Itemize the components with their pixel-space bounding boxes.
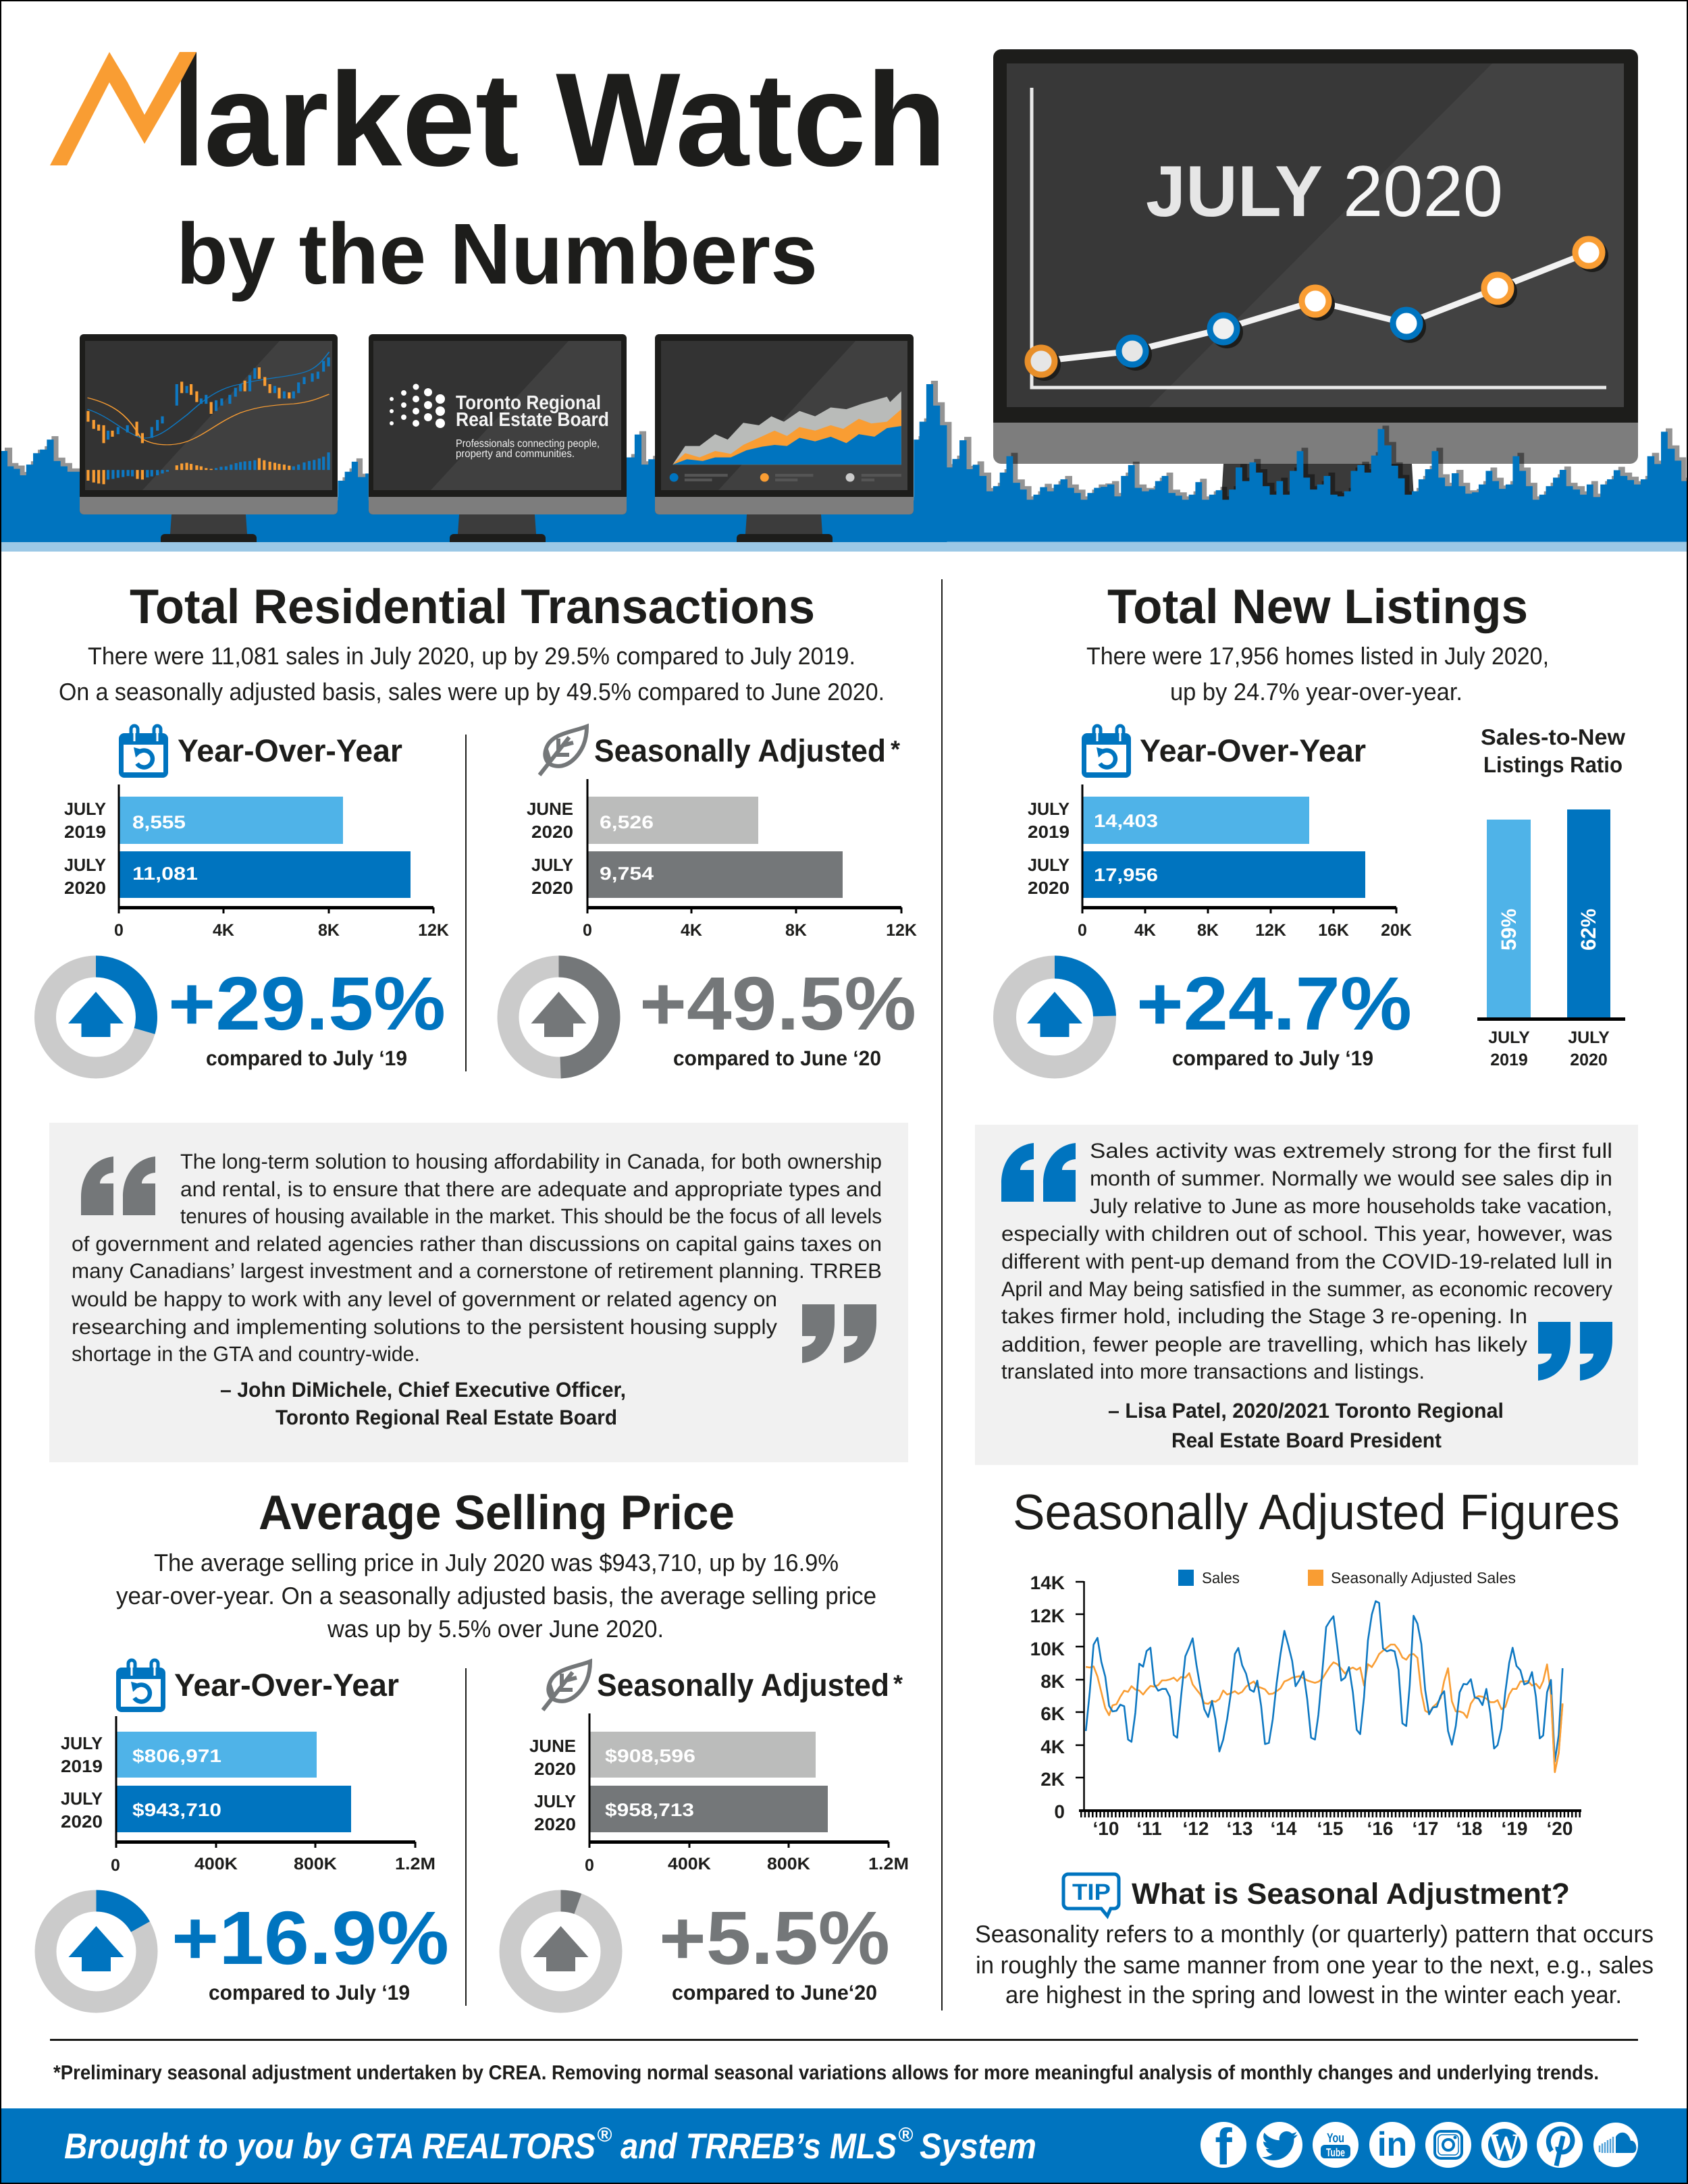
line chart: sales vs seasonally adjusted sales: 10K	[1030, 1639, 1065, 1659]
bar chart: price seasonally adjusted: 400K	[668, 1855, 711, 1873]
stat caption: compared to July ‘19	[1172, 1046, 1373, 1070]
quote text: takes firmer hold, including the Stage 3 re-opening. In	[1001, 1304, 1527, 1328]
panel: seasonally adjusted figures	[975, 1484, 1654, 2008]
footer credit: ®	[898, 2124, 914, 2146]
quote text: April and May being satisfied in the summer, as economic recovery	[1001, 1277, 1612, 1301]
subheading: seasonally adjusted: Seasonally Adjusted	[597, 1667, 889, 1703]
quote attribution: – John DiMichele, Chief Executive Officer,	[220, 1378, 626, 1402]
bar chart: price seasonally adjusted: JULY	[534, 1791, 576, 1811]
quote text: researching and implementing solutions to the persistent housing supply	[72, 1315, 778, 1339]
bar chart: price year over year: 2020	[61, 1811, 103, 1832]
bar chart: sales seasonally adjusted: 4K	[681, 921, 702, 940]
divider: main vertical	[941, 579, 943, 2010]
quote text: different with pent-up demand from the COVID-19-related lull in	[1001, 1250, 1612, 1273]
quote text: tenures of housing available in the market. This should be the focus of all levels	[180, 1204, 882, 1228]
skyline shadow	[5, 381, 1688, 539]
bar chart: sales-to-new listings ratio: 2019	[1490, 1050, 1528, 1069]
icon: calendar	[1082, 726, 1131, 778]
bar chart: price year over year: 0	[111, 1856, 120, 1875]
heading: Seasonally Adjusted Figures	[1013, 1484, 1620, 1540]
intro text	[116, 1549, 876, 1643]
bar chart: listings year over year: JULY	[1028, 799, 1070, 819]
line chart: sales vs seasonally adjusted sales: 6K	[1040, 1703, 1065, 1724]
quote text: translated into more transactions and listings.	[1001, 1360, 1425, 1383]
quote text: would be happy to work with any level of government or related agency on	[71, 1287, 777, 1311]
bar chart: sales year over year: 11,081	[132, 863, 198, 884]
quote attribution: – Lisa Patel, 2020/2021 Toronto Regional	[1108, 1399, 1504, 1422]
panel: total residential transactions	[45, 580, 917, 1071]
monitor date text: 2020	[1343, 151, 1503, 232]
icon: soundcloud	[1593, 2123, 1638, 2167]
bar chart: listings year over year: 16K	[1318, 921, 1349, 940]
intro text: There were 11,081 sales in July 2020, up by 29.5% compared to July 2019.	[88, 642, 855, 670]
bar chart: listings year over year: JULY	[1028, 855, 1070, 875]
intro text: up by 24.7% year-over-year.	[1170, 678, 1462, 705]
line chart: sales vs seasonally adjusted sales: ‘12	[1183, 1818, 1209, 1839]
seasonal adjustment explanation: in roughly the same manner from one year to the next, e.g., sales	[976, 1951, 1654, 1979]
quote attribution	[1108, 1399, 1504, 1452]
bar chart: price seasonally adjusted: 2020	[534, 1759, 576, 1779]
stat: +24.7%: +24.7%	[1136, 961, 1412, 1046]
bar chart: price seasonally adjusted: 800K	[767, 1855, 810, 1873]
line chart: sales vs seasonally adjusted sales: ‘18	[1456, 1818, 1482, 1839]
intro text	[1086, 642, 1549, 705]
bar chart: sales seasonally adjusted: JULY	[531, 855, 573, 875]
line chart: sales vs seasonally adjusted sales: ‘16	[1367, 1818, 1393, 1839]
line chart: sales vs seasonally adjusted sales: ‘10	[1093, 1818, 1119, 1839]
line chart: sales vs seasonally adjusted sales	[1030, 1569, 1581, 1839]
bar chart: price seasonally adjusted	[529, 1713, 909, 1875]
monitor date text: JULY	[1146, 151, 1323, 232]
intro text: was up by 5.5% over June 2020.	[327, 1615, 664, 1643]
stat: +5.5%: +5.5%	[659, 1896, 890, 1980]
bar chart: sales seasonally adjusted: 2020	[531, 878, 573, 898]
bar chart: listings year over year: 17,956	[1094, 865, 1158, 885]
small monitor: Toronto Regional Real Estate Board logo: property and communities.	[456, 448, 575, 460]
small monitor: Toronto Regional Real Estate Board logo	[369, 334, 627, 542]
icon: wordpress: W	[1489, 2126, 1520, 2166]
bar chart: price year over year: 1.2M	[395, 1855, 436, 1873]
line chart: sales vs seasonally adjusted sales: ‘20	[1547, 1818, 1573, 1839]
bar chart: sales year over year: 8,555	[132, 812, 186, 832]
bar chart: sales seasonally adjusted: 9,754	[600, 863, 654, 884]
bar chart: sales seasonally adjusted: 8K	[785, 921, 807, 940]
quote text: The long-term solution to housing affordability in Canada, for both ownership	[180, 1150, 882, 1173]
footer banner	[0, 2108, 1688, 2183]
quote attribution	[220, 1378, 626, 1429]
bar chart: sales-to-new listings ratio: 2020	[1570, 1050, 1608, 1069]
title: Market Watch: arket Watch	[204, 45, 947, 194]
quote text: July relative to June as more households take vacation,	[1090, 1194, 1612, 1218]
donut: +5.5%	[510, 1901, 612, 2002]
bar chart: sales seasonally adjusted	[527, 779, 917, 940]
icon: calendar	[119, 726, 168, 778]
footnote: *Preliminary seasonal adjustment undertaken by CREA. Removing normal seasonal variations allows for more meaningful analysis of monthly changes and underlying trends.	[53, 2062, 1599, 2084]
subheading: year-over-year: Year-Over-Year	[174, 1667, 399, 1703]
quote attribution: Toronto Regional Real Estate Board	[275, 1406, 617, 1429]
bar chart: price year over year	[61, 1716, 436, 1875]
quote attribution: Real Estate Board President	[1171, 1429, 1442, 1452]
line chart: sales vs seasonally adjusted sales: 14K	[1030, 1572, 1065, 1593]
bar chart: price seasonally adjusted: JUNE	[529, 1736, 576, 1756]
large monitor: July 2020	[993, 49, 1638, 520]
bar chart: listings year over year	[1028, 784, 1412, 940]
icon: twitter	[1257, 2122, 1302, 2168]
small monitor: Toronto Regional Real Estate Board logo: Toronto Regional	[456, 392, 601, 414]
donut: +24.7%	[1005, 967, 1105, 1067]
panel: average selling price	[46, 1486, 909, 2006]
subheading: what is seasonal adjustment: What is Seasonal Adjustment?	[1132, 1877, 1570, 1911]
line chart: sales vs seasonally adjusted sales: 0	[1054, 1801, 1065, 1822]
bar chart: sales year over year: 12K	[418, 921, 449, 940]
bar chart: price year over year: 800K	[294, 1855, 337, 1873]
donut: +29.5%	[45, 967, 147, 1068]
quote text	[1001, 1139, 1612, 1383]
footer credit: ®	[597, 2124, 612, 2146]
bar chart: sales year over year: 2020	[64, 878, 106, 898]
icon: tip bubble: TIP	[1072, 1880, 1111, 1905]
bar chart: sales-to-new listings ratio: Listings Ratio	[1483, 752, 1623, 777]
bar chart: sales year over year: JULY	[64, 799, 106, 819]
icon: closing quote	[1538, 1322, 1612, 1381]
stat: +49.5%: +49.5%	[639, 961, 916, 1046]
callout: Lisa Patel quote	[975, 1125, 1638, 1465]
bar chart: sales seasonally adjusted: 2020	[531, 822, 573, 842]
subheading: year-over-year: Year-Over-Year	[1140, 733, 1366, 768]
intro text: There were 17,956 homes listed in July 2020,	[1086, 642, 1549, 670]
bar chart: price seasonally adjusted: 1.2M	[868, 1855, 909, 1873]
icon: opening quote	[1001, 1143, 1076, 1202]
subheading: seasonally adjusted: *	[893, 1670, 903, 1697]
subheading: seasonally adjusted: *	[891, 735, 900, 763]
intro text: The average selling price in July 2020 was $943,710, up by 16.9%	[154, 1549, 839, 1576]
stat: +29.5%: +29.5%	[168, 961, 446, 1046]
small monitor: area chart	[655, 334, 914, 542]
stat: +16.9%: +16.9%	[172, 1896, 449, 1980]
heading: Average Selling Price	[259, 1486, 735, 1540]
bar chart: listings year over year: 8K	[1197, 921, 1219, 940]
icon: closing quote	[802, 1304, 876, 1363]
heading: Total New Listings	[1107, 580, 1528, 634]
bar chart: listings year over year: 2020	[1028, 878, 1070, 898]
donut: +49.5%	[508, 967, 609, 1068]
bar chart: sales-to-new listings ratio: Sales-to-New	[1481, 724, 1625, 749]
title: by the Numbers: by the Numbers	[176, 206, 818, 302]
line chart: sales vs seasonally adjusted sales: 12K	[1030, 1605, 1065, 1626]
chart legend: Sales	[1202, 1569, 1240, 1587]
icon: tip bubble	[1063, 1874, 1119, 1916]
icon: facebook: f	[1215, 2119, 1232, 2176]
small monitor: Toronto Regional Real Estate Board logo: Professionals connecting people,	[456, 438, 600, 450]
bar chart: listings year over year: 20K	[1381, 921, 1412, 940]
icon: instagram	[1425, 2122, 1471, 2168]
bar chart: sales-to-new listings ratio: JULY	[1568, 1028, 1610, 1047]
bar chart: sales seasonally adjusted: 12K	[886, 921, 917, 940]
divider: transactions	[465, 735, 467, 1071]
bar chart: sales-to-new listings ratio	[1477, 724, 1625, 1069]
bar chart: listings year over year: 12K	[1255, 921, 1286, 940]
quote text: shortage in the GTA and country-wide.	[72, 1342, 420, 1366]
quote text: of government and related agencies rather than discussions on capital gains taxes on	[72, 1232, 882, 1256]
quote text: and rental, is to ensure that there are adequate and appropriate types and	[180, 1177, 882, 1201]
divider: footnote rule	[50, 2039, 1638, 2041]
seasonal adjustment explanation	[975, 1920, 1654, 2008]
icon: calendar	[116, 1660, 165, 1712]
stat caption: compared to July ‘19	[209, 1981, 410, 2004]
bar chart: sales-to-new listings ratio: 62%	[1577, 909, 1600, 951]
icon: youtube	[1313, 2122, 1359, 2168]
bar chart: sales year over year	[64, 784, 449, 940]
callout: John DiMichele quote	[49, 1123, 908, 1462]
bar chart: price year over year: $806,971	[132, 1746, 221, 1766]
panel: total new listings	[1005, 580, 1625, 1070]
quote text: especially with children out of school. This year, however, was	[1001, 1222, 1612, 1246]
quote text: addition, fewer people are travelling, which has likely	[1001, 1333, 1528, 1356]
footer credit: System	[920, 2127, 1036, 2166]
stat caption: compared to June ‘20	[673, 1046, 881, 1070]
bar chart: sales seasonally adjusted: JUNE	[527, 799, 573, 819]
icon: pinterest	[1537, 2122, 1583, 2168]
line chart: sales vs seasonally adjusted sales: ‘13	[1227, 1818, 1252, 1839]
icon: leaf	[543, 1661, 590, 1710]
icon: youtube: You	[1327, 2131, 1344, 2146]
bar chart: sales-to-new listings ratio: JULY	[1488, 1028, 1530, 1047]
line chart: sales vs seasonally adjusted sales: ‘15	[1317, 1818, 1343, 1839]
bar chart: price year over year: 400K	[194, 1855, 238, 1873]
bar chart: sales-to-new listings ratio: 59%	[1497, 909, 1521, 951]
donut: +16.9%	[46, 1901, 147, 2002]
footer credit	[64, 2124, 1036, 2166]
small monitor: Toronto Regional Real Estate Board logo: Real Estate Board	[456, 409, 609, 431]
bar chart: price seasonally adjusted: $958,713	[605, 1800, 694, 1820]
icon: youtube: Tube	[1326, 2146, 1345, 2159]
stat caption: compared to June‘20	[672, 1981, 877, 2004]
bar chart: price year over year: 2019	[61, 1756, 103, 1776]
monitor line chart	[1028, 88, 1608, 388]
intro text	[59, 642, 885, 705]
line chart: sales vs seasonally adjusted sales: 2K	[1040, 1769, 1065, 1790]
skyline	[0, 384, 1688, 552]
chart legend	[1178, 1569, 1516, 1587]
stat caption: compared to July ‘19	[206, 1046, 407, 1070]
quote text: many Canadians’ largest investment and a cornerstone of retirement planning. TRREB	[72, 1259, 882, 1283]
small monitor: candlestick chart	[80, 334, 338, 542]
bar chart: sales year over year: JULY	[64, 855, 106, 875]
line chart: sales vs seasonally adjusted sales: ‘19	[1502, 1818, 1527, 1839]
subheading: seasonally adjusted: Seasonally Adjusted	[594, 733, 886, 768]
footer credit: Brought to you by GTA REALTORS	[64, 2127, 596, 2166]
bar chart: listings year over year: 0	[1078, 921, 1087, 940]
bar chart: listings year over year: 2019	[1028, 822, 1070, 842]
quote text	[71, 1150, 882, 1366]
heading: Total Residential Transactions	[130, 580, 815, 634]
bar chart: sales seasonally adjusted: 6,526	[600, 812, 654, 832]
icon: leaf	[539, 726, 587, 775]
bar chart: price year over year: $943,710	[132, 1800, 221, 1820]
icon: facebook	[1201, 2119, 1246, 2176]
intro text: On a seasonally adjusted basis, sales were up by 49.5% compared to June 2020.	[59, 678, 885, 705]
seasonal adjustment explanation: are highest in the spring and lowest in the winter each year.	[1005, 1981, 1622, 2008]
bar chart: price seasonally adjusted: 2020	[534, 1814, 576, 1834]
seasonal adjustment explanation: Seasonality refers to a monthly (or quarterly) pattern that occurs	[975, 1920, 1654, 1948]
divider: price	[465, 1668, 467, 2006]
footer credit: and TRREB’s MLS	[621, 2127, 897, 2166]
bar chart: price seasonally adjusted: $908,596	[605, 1746, 695, 1766]
icon: linkedin	[1369, 2122, 1415, 2168]
bar chart: price year over year: JULY	[61, 1733, 103, 1753]
line chart: sales vs seasonally adjusted sales: 8K	[1040, 1671, 1065, 1692]
bar chart: sales year over year: 4K	[213, 921, 234, 940]
quote text: Sales activity was extremely strong for the first full	[1090, 1139, 1612, 1163]
bar chart: price seasonally adjusted: 0	[585, 1856, 594, 1875]
line chart: sales vs seasonally adjusted sales: 4K	[1040, 1736, 1065, 1757]
bar chart: sales year over year: 0	[114, 921, 124, 940]
monitor date text	[1146, 151, 1503, 232]
bar chart: sales year over year: 8K	[318, 921, 340, 940]
intro text: year-over-year. On a seasonally adjusted basis, the average selling price	[116, 1582, 876, 1609]
icon: linkedin: in	[1377, 2125, 1407, 2163]
line chart: sales vs seasonally adjusted sales: ‘11	[1136, 1818, 1162, 1839]
quote text: month of summer. Normally we would see sales dip in	[1090, 1167, 1612, 1190]
bar chart: sales year over year: 2019	[64, 822, 106, 842]
icon: opening quote	[81, 1156, 155, 1215]
bar chart: sales seasonally adjusted: 0	[583, 921, 592, 940]
bar chart: price year over year: JULY	[61, 1788, 103, 1809]
bar chart: listings year over year: 14,403	[1094, 811, 1158, 831]
line chart: sales vs seasonally adjusted sales: ‘17	[1413, 1818, 1438, 1839]
line chart: sales vs seasonally adjusted sales: ‘14	[1271, 1818, 1297, 1839]
chart legend: Seasonally Adjusted Sales	[1331, 1569, 1516, 1587]
bar chart: listings year over year: 4K	[1134, 921, 1156, 940]
subheading: year-over-year: Year-Over-Year	[178, 733, 402, 768]
